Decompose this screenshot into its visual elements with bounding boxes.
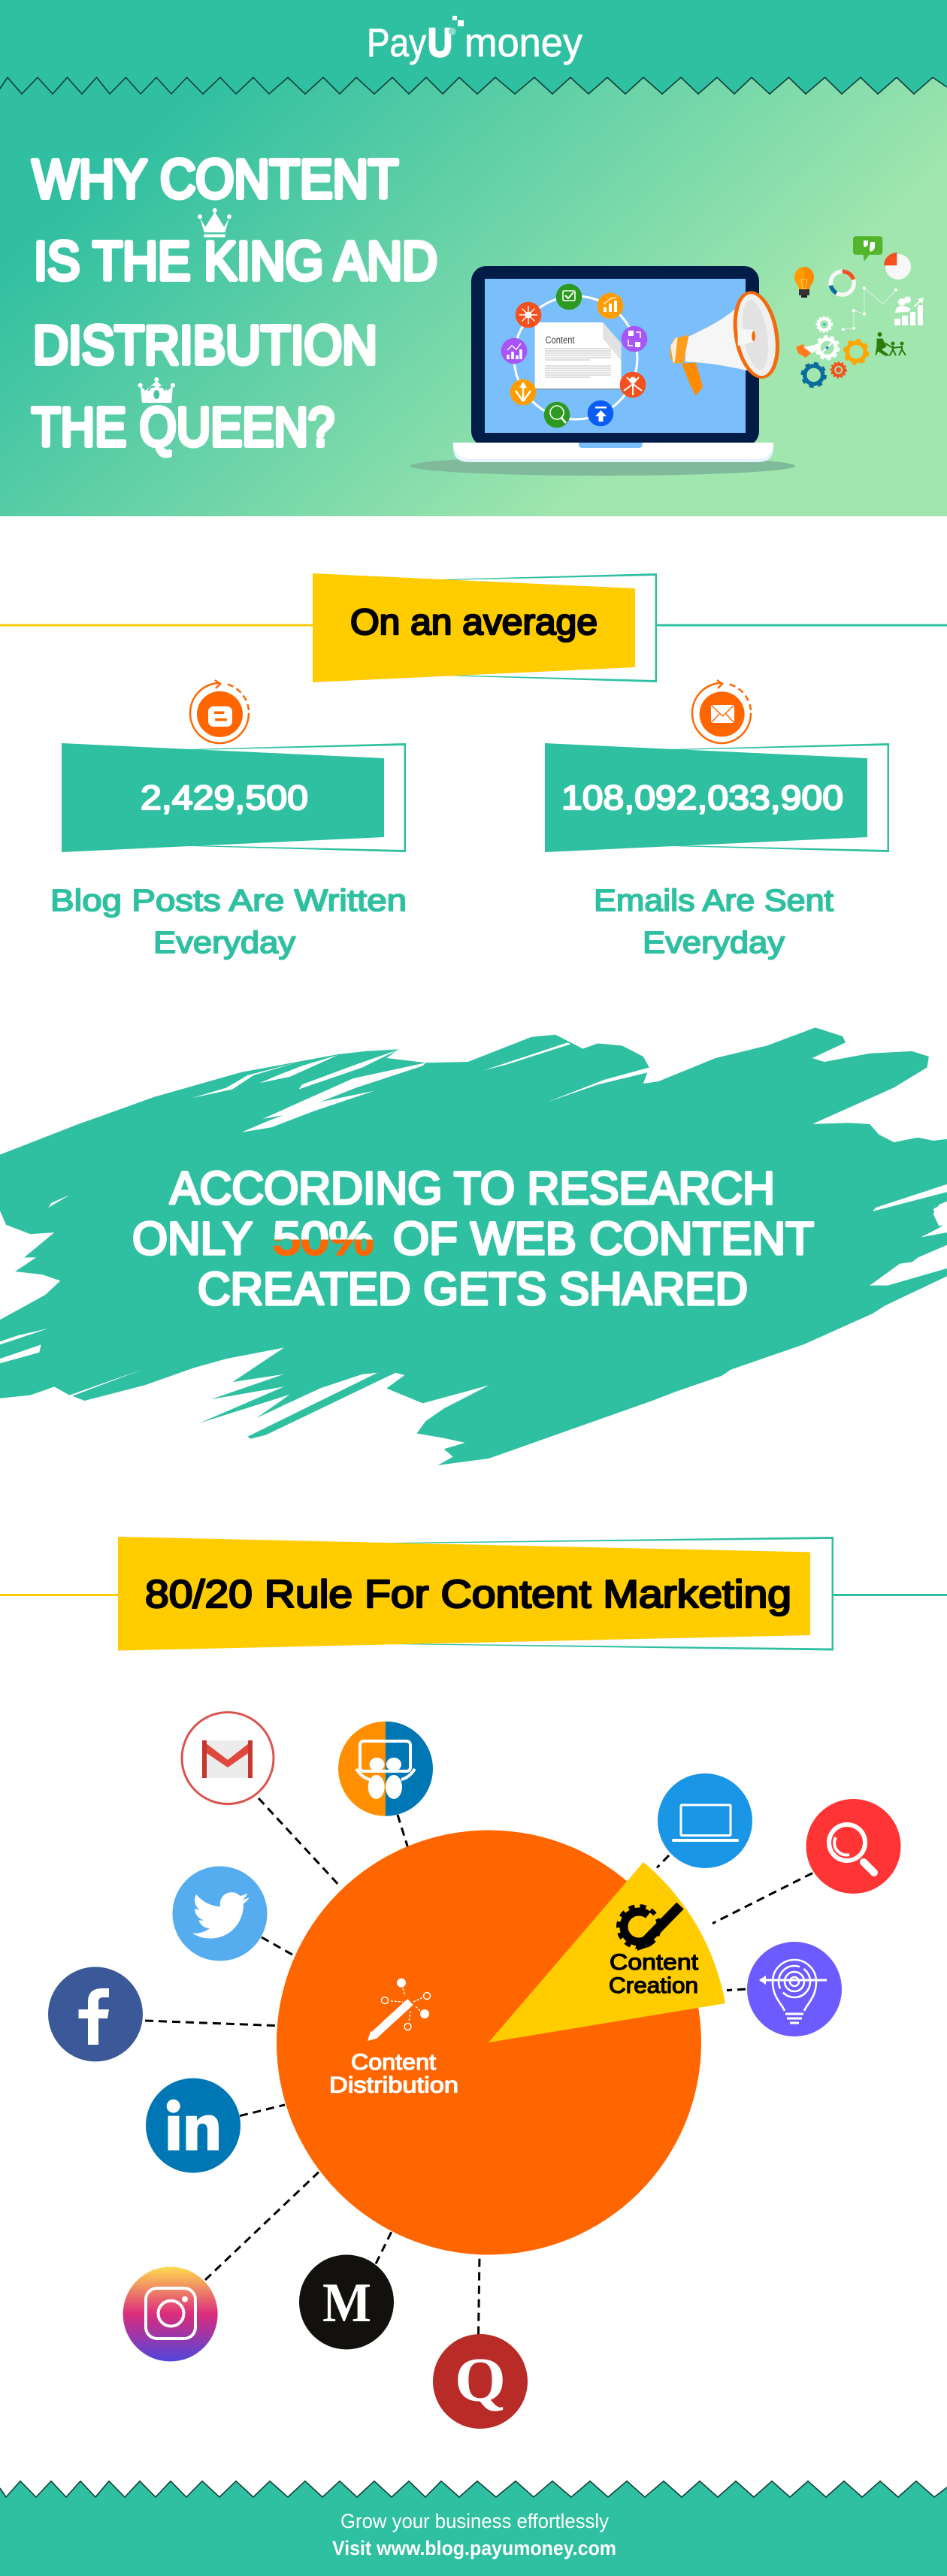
callout text: research: ACCORDING TO RESEARCH <box>170 1163 775 1214</box>
callout text: research: ONLY <box>132 1213 253 1264</box>
icon: linkedin <box>146 2079 241 2173</box>
icon: handshake and white gear <box>796 337 839 359</box>
caption: blog posts <box>50 883 407 960</box>
callout text: research <box>132 1163 814 1314</box>
icon: king crown <box>198 208 231 237</box>
icon: gmail <box>182 1713 274 1804</box>
caption: emails: Everyday <box>643 925 785 960</box>
logo: PayU money: Pay <box>367 21 426 65</box>
icon: speech bubble <box>853 236 882 262</box>
callout text: research: CREATED GETS SHARED <box>198 1263 748 1314</box>
footer band <box>0 2481 947 2576</box>
callout text: research: OF WEB CONTENT <box>393 1213 814 1264</box>
footer text <box>332 2510 616 2559</box>
label: content distribution <box>329 1979 458 2098</box>
title: THE QUEEN? <box>32 398 334 458</box>
callout text: research: 50% <box>273 1213 374 1264</box>
label: content distribution: Content <box>351 2050 437 2075</box>
section heading: 80/20 rule: 80/20 Rule For Content Marketing <box>145 1573 791 1616</box>
section heading: 80/20 rule <box>0 1537 947 1650</box>
icon: queen crown <box>138 377 175 403</box>
title: DISTRIBUTION <box>33 316 377 376</box>
icon: laptop <box>658 1773 752 1868</box>
content document <box>535 322 622 389</box>
icon: email <box>692 680 751 743</box>
stat: blog posts box: 2,429,500 <box>141 779 308 817</box>
brush stroke panel <box>0 1027 947 1465</box>
caption: blog posts: Everyday <box>153 925 296 960</box>
icon: small white gear <box>817 317 832 332</box>
content document: Content <box>546 334 575 346</box>
label: content distribution: Distribution <box>329 2073 458 2098</box>
icon: red gear <box>831 362 846 377</box>
icon: blogger <box>190 680 249 743</box>
title: IS THE KING AND <box>34 231 437 292</box>
title: WHY CONTENT <box>32 150 398 210</box>
icon: facebook <box>48 1967 143 2061</box>
illustration: laptop with content ring <box>410 266 795 476</box>
megaphone <box>670 291 782 396</box>
stat: blog posts box <box>62 743 406 852</box>
pie chart: content distribution and creation <box>277 1831 725 2254</box>
icon: search <box>806 1799 900 1894</box>
title <box>32 150 437 458</box>
icon: light bulb <box>794 267 814 298</box>
icon: green walking people <box>876 332 906 355</box>
icon: twitter <box>173 1867 268 1961</box>
ring icons <box>501 284 647 428</box>
icon: instagram <box>123 2266 218 2361</box>
icon: slideshare <box>338 1722 433 1816</box>
footer text: Visit www.blog.payumoney.com <box>332 2537 616 2559</box>
caption: emails: Emails Are Sent <box>594 883 834 918</box>
section heading: On an average <box>0 573 947 682</box>
stat: emails box <box>545 743 889 852</box>
icon: quora <box>433 2334 528 2429</box>
section heading: On an average: On an average <box>350 603 598 642</box>
icon: medium <box>299 2254 394 2349</box>
icon: idea target bulb <box>747 1942 842 2036</box>
icon: blue gear <box>802 364 825 386</box>
icon: pencil with nodes <box>368 1979 430 2041</box>
icon: people growth <box>894 296 924 325</box>
icon: donut chart <box>831 271 854 295</box>
wedge: content creation: Content <box>610 1950 699 1975</box>
caption: emails <box>594 883 834 960</box>
wedge: content creation: Creation <box>609 1973 698 1998</box>
stat: emails box: 108,092,033,900 <box>561 779 843 817</box>
logo: PayU money: money <box>464 20 582 65</box>
caption: blog posts: Blog Posts Are Written <box>50 883 407 918</box>
dashed connectors <box>145 1798 812 2335</box>
icon cluster: marketing symbols <box>794 236 924 386</box>
icon: line chart <box>842 286 897 331</box>
footer text: Grow your business effortlessly <box>340 2510 609 2532</box>
wedge: content creation <box>489 1862 725 2042</box>
icon: quora: Q <box>455 2345 506 2415</box>
icon: pie chart <box>884 252 911 280</box>
logo: PayU money <box>367 16 582 65</box>
panel: hero background <box>0 0 947 516</box>
icon: orange gear <box>845 340 868 364</box>
logo: PayU money: U <box>428 20 452 65</box>
icon: gear and pencil <box>610 1898 680 1955</box>
icon: medium: M <box>322 2272 371 2334</box>
